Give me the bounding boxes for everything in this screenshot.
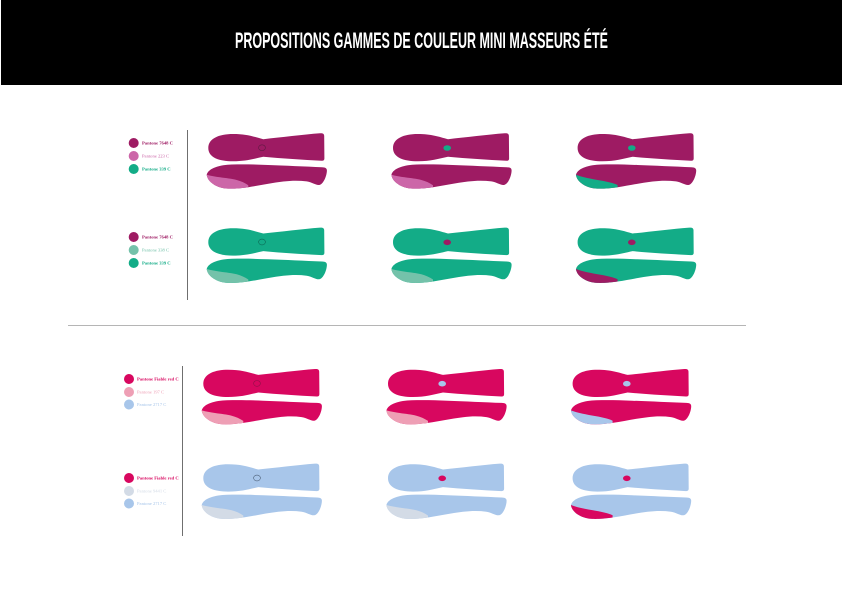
legend: row 1: Pantone 223 C xyxy=(142,154,169,159)
product: row 4 column 3 xyxy=(571,464,691,519)
divider: bottom group xyxy=(182,366,183,536)
legend: row 4: Pantone Fiable red C xyxy=(137,476,179,481)
product: row 4 column 2 xyxy=(386,464,507,519)
divider: top group xyxy=(187,130,188,300)
legend: row 4 xyxy=(124,473,179,508)
legend: row 2: Pantone 338 C xyxy=(142,248,169,253)
legend: row 1: Pantone 7648 C xyxy=(142,141,173,146)
legend: row 1 xyxy=(129,138,173,174)
product: row 1 column 2 xyxy=(391,133,512,189)
product: row 2 column 2 xyxy=(391,228,512,283)
legend: row 3: Pantone 2717 C xyxy=(137,402,166,407)
legend: row 3: Pantone Fiable red C xyxy=(137,377,179,382)
product: row 3 column 2 xyxy=(386,369,507,424)
product: row 3 column 3 xyxy=(571,369,691,424)
legend: row 2 xyxy=(129,232,173,268)
divider: horizontal xyxy=(68,325,746,326)
header band xyxy=(1,0,842,85)
legend: row 3 xyxy=(124,374,179,410)
product: row 4 column 1 xyxy=(202,464,322,519)
legend: row 2: Pantone 7648 C xyxy=(142,235,173,240)
product: row 2 column 1 xyxy=(207,228,327,283)
legend: row 4: Pantone 2717 C xyxy=(137,501,166,506)
legend: row 4: Pantone 9441 C xyxy=(137,489,166,494)
product: row 1 column 1 xyxy=(207,133,327,189)
product: row 3 column 1 xyxy=(202,369,322,424)
legend: row 3: Pantone 197 C xyxy=(137,390,164,395)
legend: row 1: Pantone 339 C xyxy=(142,167,171,172)
legend: row 2: Pantone 339 C xyxy=(142,261,171,266)
product: row 2 column 3 xyxy=(576,228,696,283)
product: row 1 column 3 xyxy=(576,133,696,189)
